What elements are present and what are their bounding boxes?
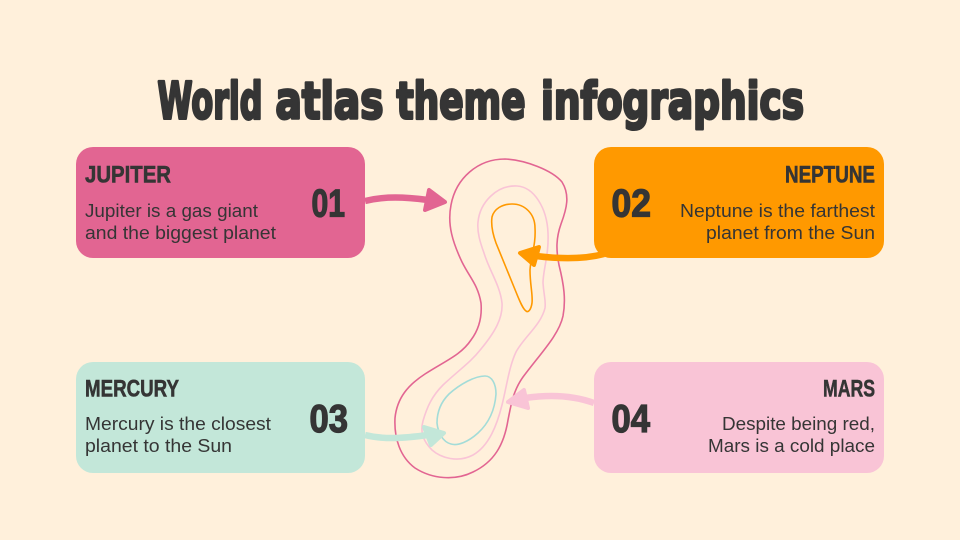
text: Mercury description [85, 414, 271, 456]
arrow: Mercury [365, 427, 444, 445]
text: Mercury description: planet to the Sun [85, 436, 232, 456]
number 01: 01 [312, 182, 345, 226]
panel: Mercury [76, 362, 365, 473]
number 04: 04 [612, 398, 650, 441]
contour: inner teal [437, 376, 496, 445]
title: atlas [276, 72, 384, 130]
text: Mars description [708, 414, 875, 456]
text: Neptune description: planet from the Sun [706, 223, 875, 243]
contour: outer [395, 159, 567, 478]
text: Jupiter description: and the biggest planet [85, 223, 276, 243]
text: Neptune description: Neptune is the farthest [680, 201, 875, 221]
arrow: Mars [508, 390, 594, 408]
contour: middle [422, 186, 548, 459]
title: World [158, 72, 262, 130]
text: Neptune description [680, 201, 875, 243]
heading: Jupiter: JUPITER [85, 162, 171, 188]
text: Mars description: Mars is a cold place [708, 436, 875, 456]
panel: Jupiter [76, 147, 365, 258]
heading: Mars: MARS [823, 376, 875, 402]
number 03: 03 [310, 398, 348, 441]
title: theme [396, 72, 526, 130]
text: Jupiter description: Jupiter is a gas giant [85, 201, 258, 221]
contour map [395, 159, 567, 478]
panel: Neptune [594, 147, 884, 258]
arrow: Jupiter [365, 190, 445, 210]
contour: inner orange [492, 204, 535, 312]
arrow: Neptune [520, 247, 604, 265]
text: Mercury description: Mercury is the closest [85, 414, 271, 434]
heading: Neptune: NEPTUNE [785, 162, 875, 188]
text: Jupiter description [85, 201, 276, 243]
number 02: 02 [612, 182, 651, 226]
heading: Mercury: MERCURY [85, 376, 179, 402]
text: Mars description: Despite being red, [722, 414, 875, 434]
panel: Mars [594, 362, 884, 473]
title [158, 72, 804, 130]
title: infographics [541, 72, 804, 130]
